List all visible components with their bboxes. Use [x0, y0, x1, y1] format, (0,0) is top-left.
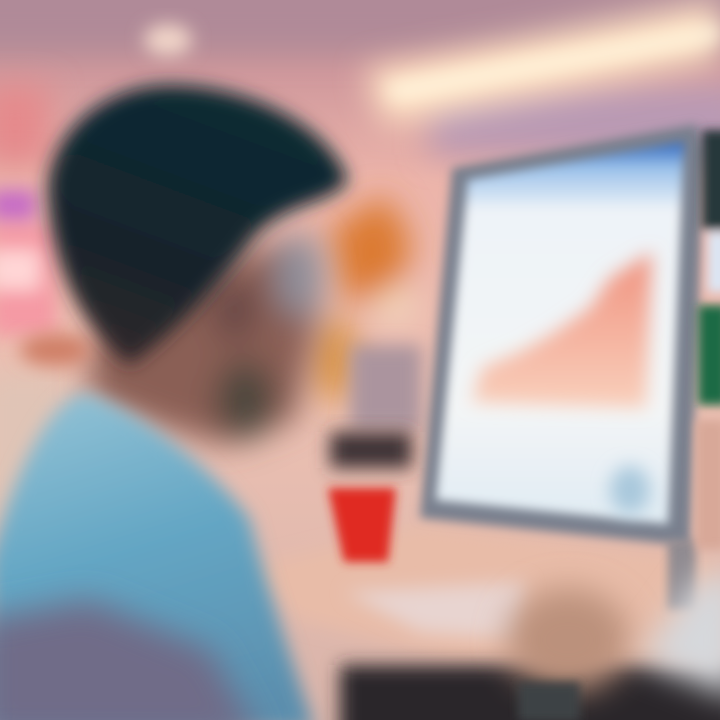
right foreground: light sleeve: [640, 575, 720, 700]
shoulder: warm edge: [20, 334, 90, 366]
person: [0, 85, 348, 720]
hand and watch: [506, 588, 630, 720]
monitor stand: [668, 540, 696, 610]
ceiling light: long glow: [365, 0, 720, 125]
left neon sign: [0, 190, 56, 335]
keyboard: [345, 582, 525, 640]
red cup: [328, 432, 412, 562]
plant: orange leaves: [311, 195, 415, 402]
shirt: [0, 392, 315, 720]
right edge: dark and green background: [696, 130, 720, 550]
area chart: [472, 252, 652, 408]
monitor: [420, 124, 704, 546]
shirt shadow: [0, 600, 260, 720]
background object: grey box: [350, 345, 422, 430]
desk surface: [240, 525, 720, 720]
monitor frame: [420, 124, 704, 546]
hair: [48, 85, 348, 365]
monitor screen: [436, 142, 684, 524]
small chart detail: [610, 466, 650, 514]
ceiling light: round spot: [144, 24, 192, 56]
neck and face: [90, 233, 324, 445]
